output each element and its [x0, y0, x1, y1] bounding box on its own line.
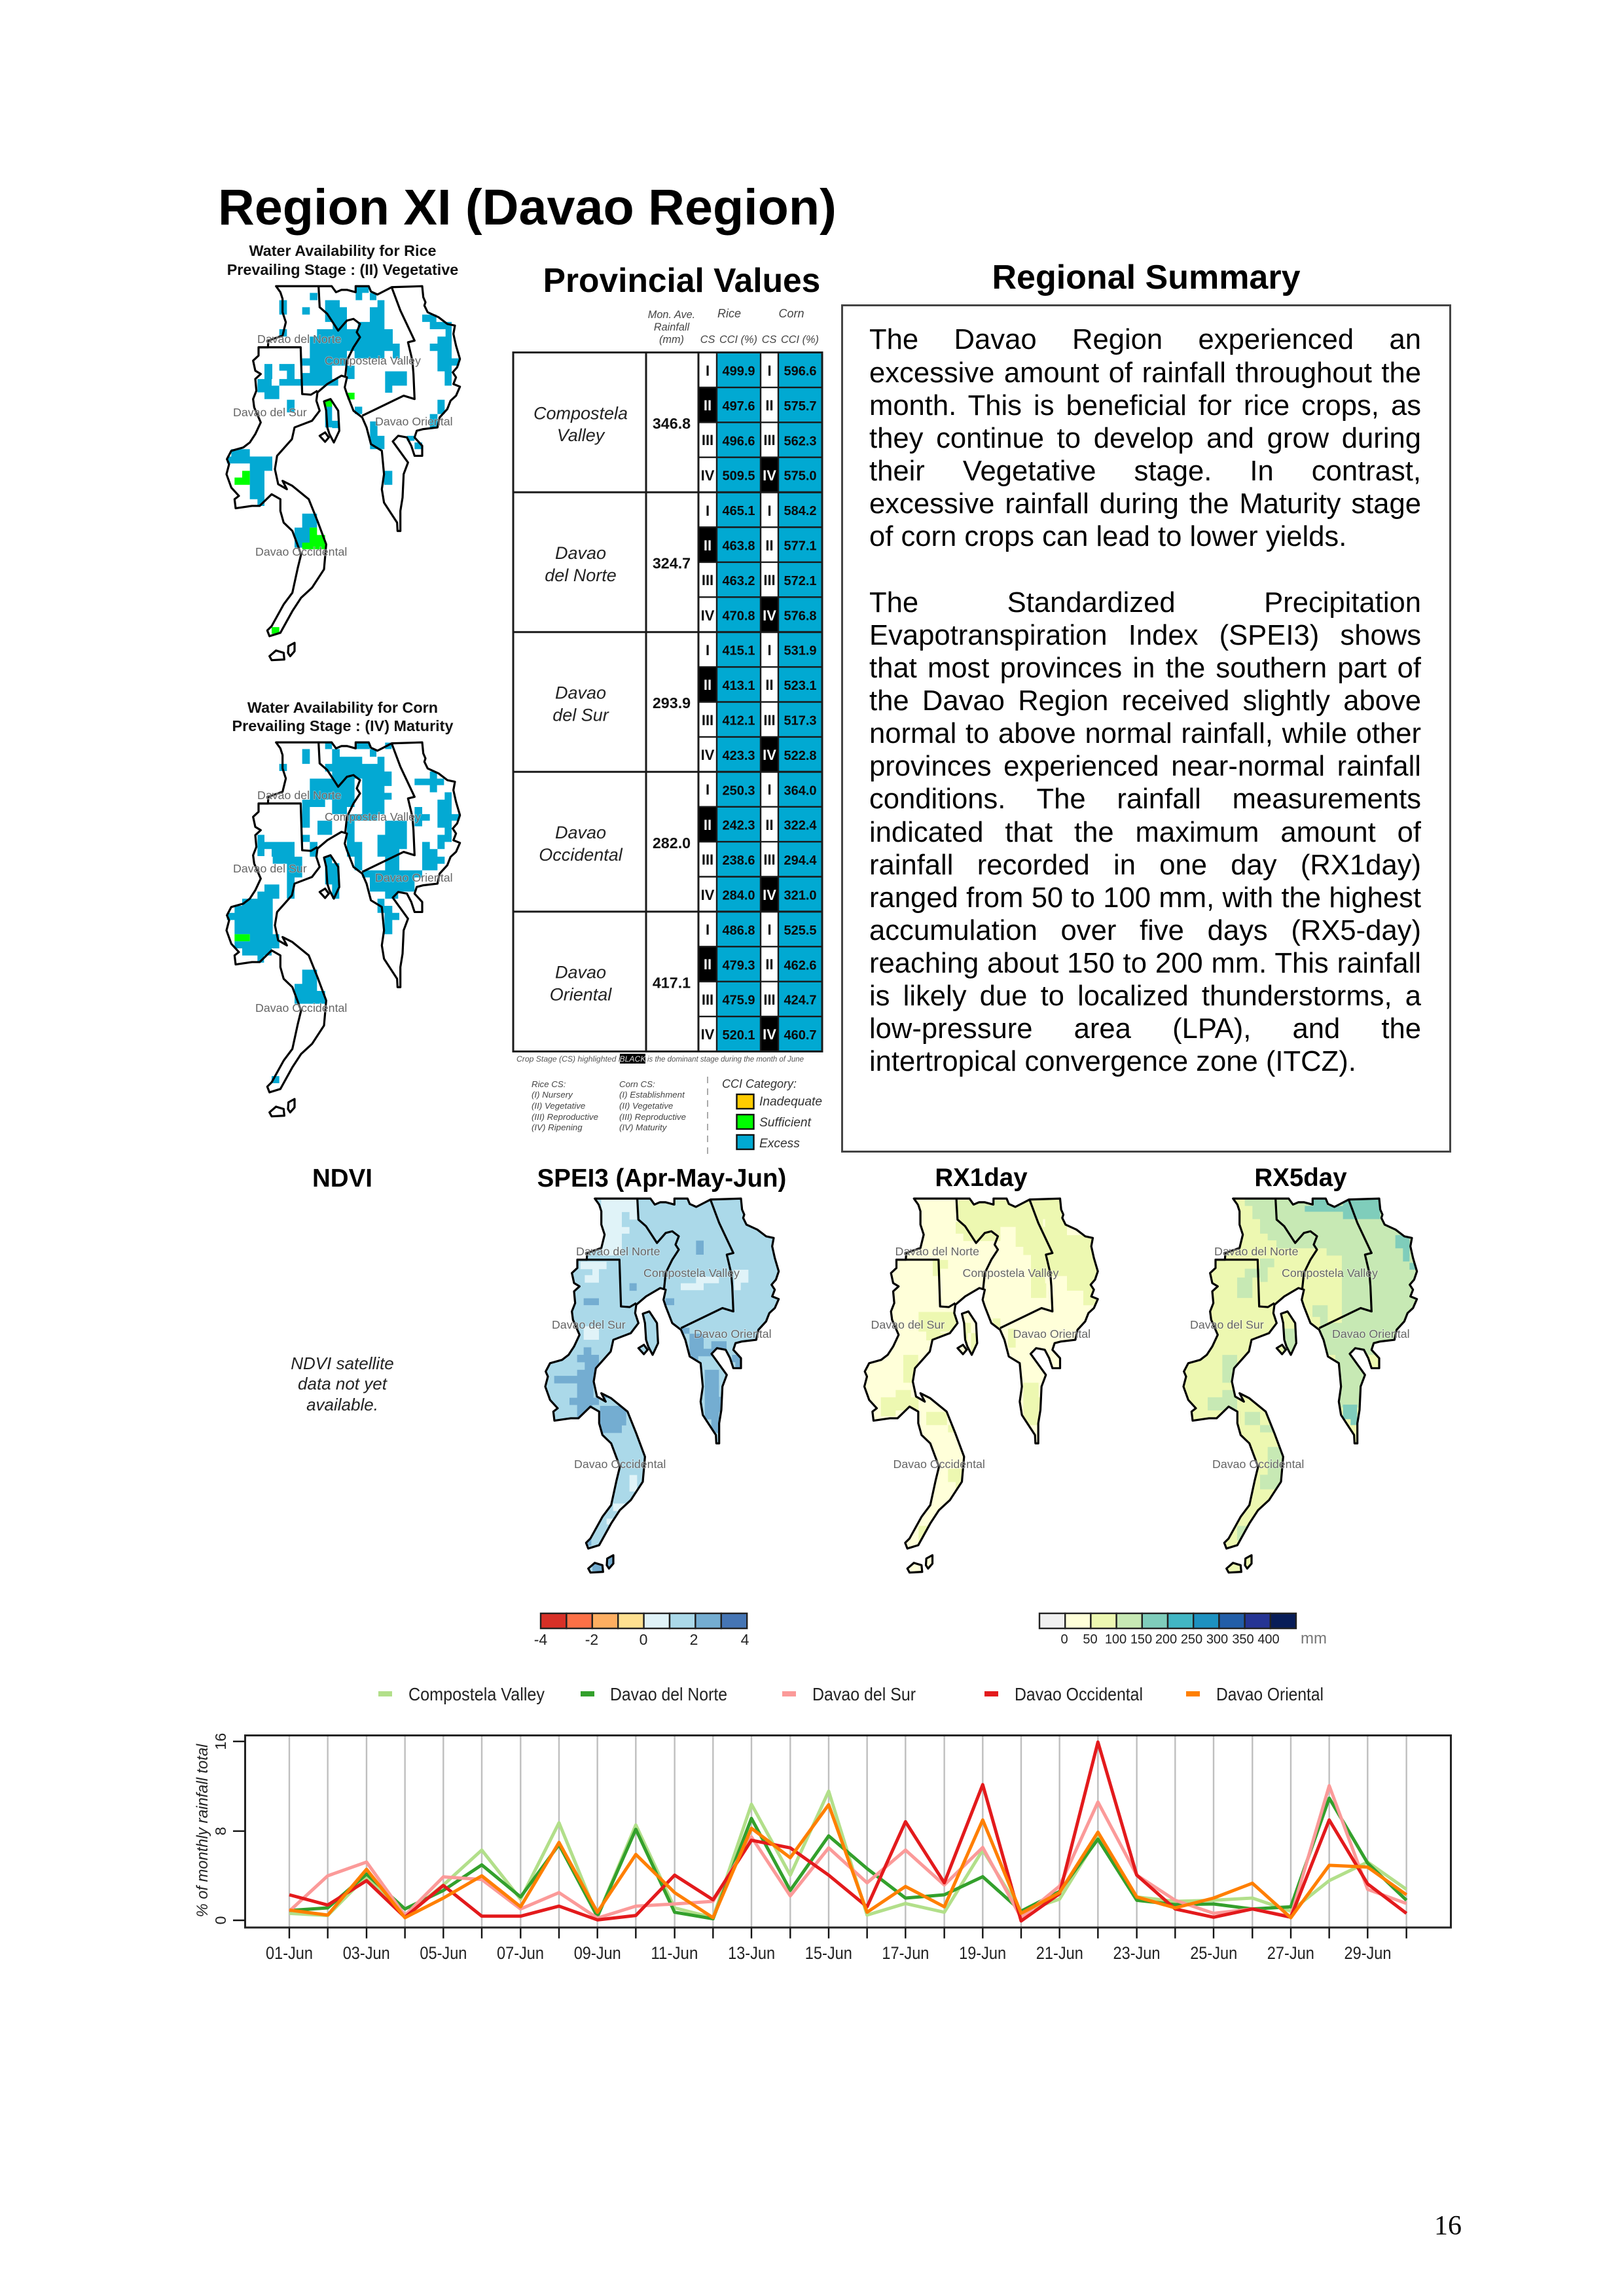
province row: Davao Occidental: 322.4 [784, 819, 817, 833]
province row: Davao del Sur: III [763, 712, 776, 728]
heading: RX5day: RX5day [1254, 1164, 1347, 1192]
province row: Davao del Norte: II [704, 537, 712, 554]
province row: Compostela Valley: 562.3 [784, 434, 817, 448]
legend: CCI category [722, 1077, 822, 1151]
province row: Davao del Norte: I [767, 503, 772, 519]
series: Davao Occidental [289, 1742, 1407, 1921]
province row: Davao Occidental: II [765, 817, 774, 833]
line chart: % of monthly rainfall total [194, 1733, 1451, 1963]
paragraph: SPEI3 and rainfall extremes: is likely due to localized thunderstorms, a [869, 980, 1421, 1012]
RX1day province labels: Davao Occidental [893, 1458, 985, 1471]
province row: Davao Occidental: 242.3 [722, 819, 755, 833]
NDVI note [291, 1354, 394, 1414]
rice map outline [226, 286, 460, 660]
heading: rice water availability: Prevailing Stage : (II) Vegetative [227, 261, 458, 278]
colorbar: SPEI3: 2 [690, 1631, 698, 1648]
legend: CCI category: Inadequate [759, 1095, 822, 1109]
paragraph: SPEI3 and rainfall extremes: that most provinces in the southern part of [869, 653, 1421, 684]
SPEI3 above-normal cells [554, 1240, 742, 1571]
province row: Davao del Sur: I [706, 642, 710, 658]
RX5day province labels: Davao del Norte [1214, 1245, 1299, 1258]
SPEI3 province labels: Davao del Sur [552, 1318, 626, 1331]
legend: CCI category: Excess [759, 1137, 800, 1151]
SPEI3 map outline [545, 1198, 779, 1573]
RX1day province labels: Davao del Sur [871, 1318, 945, 1331]
heading: corn water availability: Water Availability for Corn [247, 699, 438, 716]
RX5day land fill [1183, 1198, 1417, 1573]
series: Davao Oriental [289, 1804, 1407, 1918]
RX5day 150-200 mm cells [1305, 1198, 1416, 1425]
RX5day province labels: Davao Occidental [1212, 1458, 1304, 1471]
province row: Davao Occidental: 294.4 [784, 853, 817, 868]
x axis date labels: 25-Jun [1190, 1943, 1237, 1963]
province row: Davao Oriental: I [767, 922, 772, 938]
province row: Davao Oriental: 520.1 [722, 1028, 755, 1043]
province row: Compostela Valley: 575.0 [784, 469, 817, 484]
province row: Compostela Valley: 509.5 [722, 469, 755, 484]
RX5day 100-150 mm cells [1208, 1198, 1418, 1541]
corn map province labels [233, 789, 453, 1014]
RX5day map outline [1183, 1198, 1417, 1573]
heading: SPEI3: SPEI3 (Apr-May-Jun) [537, 1164, 786, 1193]
NDVI note: available. [306, 1395, 378, 1414]
corn map province labels: Davao del Sur [233, 862, 307, 875]
province row: Davao Oriental: III [702, 992, 713, 1008]
x axis date labels: 19-Jun [959, 1943, 1006, 1963]
summary box [842, 305, 1451, 1152]
legend: CCI category: CCI Category: [722, 1077, 797, 1090]
province row: Compostela Valley: 596.6 [784, 364, 817, 378]
colorbar: SPEI3: -4 [534, 1631, 547, 1648]
province row: Davao Oriental: 462.6 [784, 958, 817, 973]
table footnote: is the dominant stage during the month of June [647, 1054, 804, 1064]
colorbar: SPEI3: -2 [585, 1631, 598, 1648]
RX1day province labels: Davao del Norte [895, 1245, 979, 1258]
x axis date labels: 05-Jun [420, 1943, 467, 1963]
province row: Davao Oriental: I [706, 922, 710, 938]
paragraph: SPEI3 and rainfall extremes: accumulation over five days (RX5-day) [869, 915, 1421, 946]
x axis date labels: 13-Jun [728, 1943, 775, 1963]
paragraph: rainfall and crops: month. This is beneficial for rice crops, as [869, 390, 1421, 422]
RX5day province labels [1190, 1245, 1410, 1471]
series: Davao del Norte [289, 1798, 1407, 1919]
SPEI3 province labels: Davao Oriental [694, 1327, 772, 1340]
province row: Compostela Valley: 496.6 [722, 434, 755, 448]
paragraph: rainfall and crops: their Vegetative stage. In contrast, [869, 456, 1421, 487]
RX1day province labels [871, 1245, 1091, 1471]
province row: Davao del Norte: IV [701, 607, 715, 624]
province row: Davao del Sur: del Sur [552, 706, 609, 725]
corn map province labels: Compostela Valley [325, 810, 421, 823]
province row: Davao del Sur: IV [763, 747, 776, 763]
province row: Davao Occidental: II [704, 817, 712, 833]
province row: Davao del Sur: 413.1 [722, 679, 755, 693]
colorbar: rainfall mm: 250 [1181, 1632, 1202, 1647]
heading: provincial values: Provincial Values [543, 261, 820, 299]
RX1day 50-100 mm cells [881, 1198, 1098, 1542]
legend: rice crop stages [532, 1079, 598, 1132]
heading: regional summary: Regional Summary [992, 259, 1301, 296]
province row: Davao Oriental: 460.7 [784, 1028, 817, 1043]
province row: Davao del Norte: 572.1 [784, 574, 817, 588]
RX5day province labels: Davao Oriental [1332, 1327, 1410, 1340]
rice map province labels [233, 332, 453, 558]
legend: rice crop stages: (III) Reproductive [532, 1112, 598, 1122]
province row: Compostela Valley: I [767, 363, 772, 379]
province row: Davao del Sur: 522.8 [784, 749, 817, 763]
province row: Davao del Sur: IV [701, 747, 715, 763]
province row: Davao Occidental: 364.0 [784, 783, 817, 798]
colorbar: rainfall mm: 350 [1232, 1632, 1254, 1647]
NDVI note: data not yet [298, 1374, 388, 1393]
RX5day province labels: Davao del Sur [1190, 1318, 1264, 1331]
heading: corn water availability [232, 699, 453, 734]
legend: CCI category: Sufficient [759, 1116, 812, 1130]
colorbar: SPEI3: 4 [741, 1631, 749, 1648]
y axis ticks and labels: 8 [212, 1827, 229, 1835]
province row: Davao del Norte: 324.7 [653, 555, 691, 572]
heading: rice water availability [227, 242, 458, 278]
line chart legend: Davao Occidental [1015, 1684, 1143, 1704]
table footnote [516, 1054, 804, 1064]
province row: Davao Oriental: 424.7 [784, 994, 817, 1008]
province row: Compostela Valley: I [706, 363, 710, 379]
colorbar: rainfall mm: 150 [1130, 1632, 1152, 1647]
colorbar: rainfall mm: 0 [1060, 1632, 1068, 1647]
province row: Davao Occidental: Occidental [539, 845, 623, 865]
x axis date labels: 23-Jun [1113, 1943, 1160, 1963]
province row: Davao del Norte: del Norte [545, 565, 617, 585]
province row: Davao Oriental: Oriental [550, 984, 612, 1004]
RX1day land fill [864, 1198, 1098, 1573]
paragraph: SPEI3 and rainfall extremes: normal to above normal rainfall, while other [869, 718, 1421, 749]
legend: rice crop stages: (IV) Ripening [532, 1122, 583, 1132]
table column headers: Rainfall [654, 321, 690, 333]
SPEI3 near-normal cells [581, 1198, 748, 1524]
province row: Davao Occidental: 250.3 [722, 783, 755, 798]
RX1day province labels: Compostela Valley [962, 1266, 1059, 1280]
colorbar: rainfall mm: 400 [1257, 1632, 1280, 1647]
SPEI3 province labels: Davao Occidental [574, 1458, 666, 1471]
colorbar: rainfall mm: mm [1301, 1630, 1327, 1647]
map: RX1day [864, 1164, 1098, 1573]
province row: Compostela Valley: 499.9 [722, 364, 755, 378]
paragraph: SPEI3 and rainfall extremes: indicated that the maximum amount of [869, 817, 1421, 848]
province row: Davao Occidental: III [702, 852, 713, 868]
legend: corn crop stages: (II) Vegetative [619, 1101, 673, 1111]
province row: Davao del Sur: 293.9 [653, 694, 691, 711]
title: Region XI (Davao Region) [218, 179, 837, 236]
x axis date labels: 01-Jun [266, 1943, 313, 1963]
paragraph: SPEI3 and rainfall extremes: Evapotranspiration Index (SPEI3) shows [869, 620, 1421, 651]
province row: Davao Oriental: IV [763, 1026, 776, 1043]
province row: Davao del Norte: IV [763, 607, 776, 624]
province row: Davao Oriental: 417.1 [653, 974, 691, 991]
paragraph: SPEI3 and rainfall extremes: the Davao Region received slightly above [869, 685, 1421, 717]
SPEI3 province labels: Davao del Norte [576, 1245, 660, 1258]
province row: Compostela Valley: IV [701, 467, 715, 484]
SPEI3 province labels [552, 1245, 772, 1471]
province row: Davao del Sur: I [767, 642, 772, 658]
province row: Davao del Norte: III [763, 572, 776, 588]
province row: Davao Occidental: 282.0 [653, 834, 691, 852]
provincial values table [513, 307, 822, 1051]
province row: Davao Occidental: I [706, 781, 710, 798]
province row: Davao del Norte: 465.1 [722, 504, 755, 518]
line chart legend: Davao del Sur [812, 1684, 916, 1704]
province row: Davao Occidental: 284.0 [722, 889, 755, 903]
heading: RX1day: RX1day [935, 1164, 1028, 1192]
province row: Compostela Valley: 346.8 [653, 415, 691, 432]
province row: Davao Occidental: 321.0 [784, 889, 817, 903]
rice map province labels: Davao del Norte [257, 332, 342, 346]
corn excess cells [227, 743, 460, 1083]
province row: Davao Oriental: 486.8 [722, 924, 755, 938]
province row: Compostela Valley: 575.7 [784, 399, 817, 414]
table column headers: CCI (%) [781, 334, 819, 346]
legend: corn crop stages: (I) Establishment [619, 1090, 685, 1100]
province row: Davao del Norte: III [702, 572, 713, 588]
RX5day province labels: Compostela Valley [1282, 1266, 1378, 1280]
colorbar: rainfall mm: 50 [1083, 1632, 1098, 1647]
province row: Davao del Norte: 463.2 [722, 574, 755, 588]
paragraph: SPEI3 and rainfall extremes: The Standardized Precipitation [869, 587, 1421, 619]
line chart legend: Compostela Valley [408, 1684, 545, 1704]
legend: corn crop stages: (IV) Maturity [619, 1122, 668, 1132]
legend: rice crop stages: (I) Nursery [532, 1090, 573, 1100]
province row: Davao del Norte: 470.8 [722, 609, 755, 623]
SPEI3 land fill [545, 1198, 779, 1573]
paragraph: rainfall and crops: excessive amount of rainfall throughout the [869, 357, 1421, 389]
paragraph: SPEI3 and rainfall extremes [869, 587, 1421, 1077]
infographic canvas [196, 188, 1461, 2234]
y axis ticks and labels: 0 [212, 1916, 229, 1925]
rice map province labels: Compostela Valley [325, 354, 421, 367]
province row: Davao Oriental: 475.9 [722, 994, 755, 1008]
legend: corn crop stages [619, 1079, 686, 1132]
province row: Davao del Sur: III [702, 712, 713, 728]
province row: Davao Occidental: IV [763, 887, 776, 903]
rice map province labels: Davao Occidental [255, 545, 347, 558]
x axis date labels: 09-Jun [574, 1943, 621, 1963]
province row: Compostela Valley: II [704, 397, 712, 414]
table cell fills [513, 352, 822, 1051]
province row: Davao del Sur: II [765, 677, 774, 693]
map: water availability for rice [226, 242, 460, 660]
paragraph: rainfall and crops [869, 324, 1421, 552]
RX1day province labels: Davao Oriental [1013, 1327, 1091, 1340]
province row: Davao del Sur: II [704, 677, 712, 693]
table column headers: CCI (%) [719, 334, 757, 346]
province row: Compostela Valley: Valley [557, 425, 605, 445]
rice map province labels: Davao del Sur [233, 406, 307, 419]
paragraph: SPEI3 and rainfall extremes: rainfall recorded in one day (RX1day) [869, 850, 1421, 881]
x axis date labels: 15-Jun [805, 1943, 852, 1963]
province row: Davao del Sur: 415.1 [722, 644, 755, 658]
colorbar: rainfall mm: 200 [1155, 1632, 1177, 1647]
colorbar: SPEI3: 0 [640, 1631, 647, 1648]
paragraph: SPEI3 and rainfall extremes: provinces experienced near-normal rainfall [869, 751, 1421, 782]
province row: Davao del Sur: 517.3 [784, 713, 817, 728]
province row: Davao Oriental: IV [701, 1026, 715, 1043]
province row: Davao del Norte [545, 503, 817, 624]
y axis ticks and labels: 16 [212, 1733, 229, 1750]
x axis date labels: 03-Jun [343, 1943, 390, 1963]
table column headers: (mm) [659, 334, 684, 346]
province row: Compostela Valley: II [765, 397, 774, 414]
regional summary text [869, 324, 1421, 1077]
province row: Compostela Valley: III [763, 432, 776, 448]
province row: Davao del Norte: I [706, 503, 710, 519]
province row: Davao del Norte: 463.8 [722, 539, 755, 554]
province row: Davao Oriental [550, 922, 817, 1043]
paragraph: rainfall and crops: excessive rainfall during the Maturity stage [869, 488, 1421, 520]
x axis date labels: 27-Jun [1267, 1943, 1314, 1963]
province row: Davao del Norte: II [765, 537, 774, 554]
table footnote: BLACK [620, 1054, 646, 1064]
province row: Compostela Valley [533, 363, 817, 484]
province row: Davao del Sur: Davao [555, 683, 606, 703]
colorbar: SPEI3 [534, 1613, 749, 1648]
corn map province labels: Davao Oriental [375, 871, 453, 884]
legend: corn crop stages: Corn CS: [619, 1079, 655, 1089]
x axis date labels: 11-Jun [651, 1943, 698, 1963]
paragraph: SPEI3 and rainfall extremes: low-pressure area (LPA), and the [869, 1013, 1421, 1045]
map: SPEI3 [537, 1164, 786, 1573]
paragraph: SPEI3 and rainfall extremes: intertropical convergence zone (ITCZ). [869, 1046, 1356, 1077]
province row: Davao Occidental: I [767, 781, 772, 798]
rice excess cells [227, 286, 460, 548]
line chart legend [378, 1684, 1324, 1704]
paragraph: rainfall and crops: of corn crops can lead to lower yields. [869, 521, 1346, 552]
table column headers: CS [762, 334, 776, 346]
map: RX5day [1183, 1164, 1418, 1573]
table column headers [648, 307, 819, 346]
paragraph: SPEI3 and rainfall extremes: conditions. The rainfall measurements [869, 783, 1421, 815]
province row: Davao Oriental: II [704, 956, 712, 973]
legend: corn crop stages: (III) Reproductive [619, 1112, 686, 1122]
legend: rice crop stages: (II) Vegetative [532, 1101, 585, 1111]
province row: Davao Occidental [539, 781, 817, 903]
province row: Davao del Sur: 523.1 [784, 679, 817, 693]
corn map outline [226, 742, 460, 1117]
heading: corn water availability: Prevailing Stage : (IV) Maturity [232, 717, 453, 734]
rice map province labels: Davao Oriental [375, 415, 453, 428]
chart frame [245, 1736, 1451, 1928]
province row: Davao del Sur: 412.1 [722, 713, 755, 728]
RX1day map outline [864, 1198, 1098, 1573]
corn sufficient cell [234, 934, 250, 941]
heading: rice water availability: Water Availability for Rice [249, 242, 436, 259]
NDVI note: NDVI satellite [291, 1354, 394, 1373]
table column headers: Rice [717, 307, 741, 320]
province row: Davao Occidental: 238.6 [722, 853, 755, 868]
table footnote: Crop Stage (CS) highlighted in [516, 1054, 625, 1064]
x axis date labels [266, 1943, 1392, 1963]
province row: Davao Oriental: 479.3 [722, 958, 755, 973]
province row: Davao Occidental: Davao [555, 823, 606, 842]
page number: 16 [1434, 2211, 1462, 2241]
line chart legend: Davao del Norte [610, 1684, 727, 1704]
province row: Davao del Sur [552, 642, 817, 763]
SPEI3 province labels: Compostela Valley [643, 1266, 740, 1280]
line chart legend: Davao Oriental [1216, 1684, 1324, 1704]
heading: NDVI: NDVI [312, 1164, 372, 1193]
x axis date labels: 29-Jun [1344, 1943, 1392, 1963]
province row: Davao del Norte: 584.2 [784, 504, 817, 518]
series: Davao del Sur [289, 1785, 1407, 1918]
colorbar: rainfall mm: 100 [1105, 1632, 1127, 1647]
province row: Compostela Valley: III [702, 432, 713, 448]
legend: rice crop stages: Rice CS: [532, 1079, 566, 1089]
province row: Davao del Sur: 531.9 [784, 644, 817, 658]
province row: Davao del Sur: 423.3 [722, 749, 755, 763]
paragraph: SPEI3 and rainfall extremes: ranged from 50 to 100 mm, with the highest [869, 882, 1421, 914]
y axis ticks and labels [212, 1733, 245, 1925]
series: Compostela Valley [289, 1791, 1407, 1918]
province row: Davao Oriental: Davao [555, 962, 606, 982]
province row: Davao Oriental: 525.5 [784, 924, 817, 938]
province row: Davao Oriental: II [765, 956, 774, 973]
table column headers: Mon. Ave. [648, 309, 695, 321]
paragraph: rainfall and crops: The Davao Region experienced an [869, 324, 1421, 355]
province row: Davao Occidental: IV [701, 887, 715, 903]
province row: Davao del Norte: 576.8 [784, 609, 817, 623]
rice sufficient cells [234, 393, 355, 634]
province row: Davao Occidental: III [763, 852, 776, 868]
table column headers: CS [700, 334, 715, 346]
page [196, 188, 1461, 2234]
x axis date labels: 07-Jun [497, 1943, 544, 1963]
x axis date labels: 17-Jun [882, 1943, 929, 1963]
table column headers: Corn [778, 307, 804, 320]
colorbar: rainfall mm: 300 [1206, 1632, 1228, 1647]
province row: Compostela Valley: 497.6 [722, 399, 755, 414]
corn map province labels: Davao Occidental [255, 1001, 347, 1014]
paragraph: SPEI3 and rainfall extremes: reaching about 150 to 200 mm. This rainfall [869, 948, 1421, 979]
colorbar: rainfall mm [1039, 1613, 1327, 1647]
paragraph: rainfall and crops: they continue to develop and grow during [869, 423, 1421, 454]
province row: Davao Oriental: III [763, 992, 776, 1008]
province row: Davao del Norte: Davao [555, 543, 606, 563]
province row: Compostela Valley: IV [763, 467, 776, 484]
corn map province labels: Davao del Norte [257, 789, 342, 802]
province row: Compostela Valley: Compostela [533, 403, 628, 423]
map: water availability for corn [226, 699, 460, 1117]
x axis date labels: 21-Jun [1036, 1943, 1083, 1963]
y axis title: % of monthly rainfall total [194, 1744, 211, 1917]
province row: Davao del Norte: 577.1 [784, 539, 817, 554]
